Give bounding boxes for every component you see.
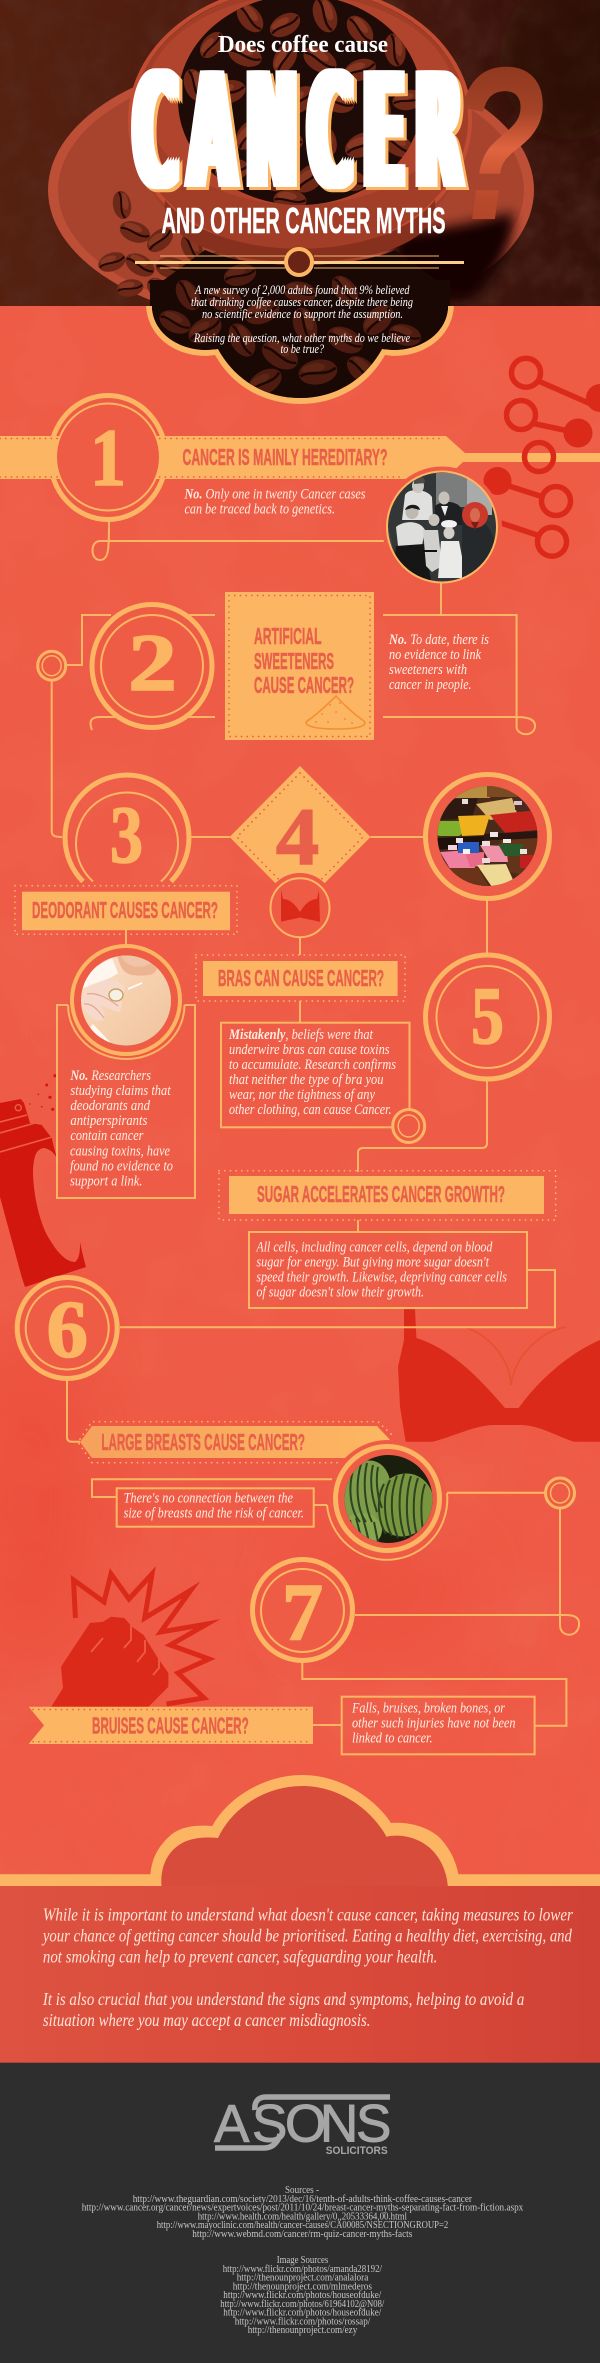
- myth 3 heading box: DEODORANT CAUSES CANCER?: [32, 897, 218, 923]
- photo: family: [384, 466, 502, 584]
- beans in cup: [180, 0, 425, 212]
- myth 5 heading box: [219, 1171, 556, 1220]
- myth 4 answer box: [221, 1023, 410, 1127]
- myth 3 answer: deodorants and: [70, 1098, 150, 1114]
- image sources: http://thenounproject.com/mlmederos: [233, 2281, 372, 2292]
- image sources: http://www.flickr.com/photos/houseofduke/: [223, 2308, 381, 2318]
- connector 5: [358, 901, 487, 1232]
- sources: http://www.mayoclinic.com/health/cancer-causes/CA00085/NSECTIONGROUP=2: [157, 2220, 448, 2231]
- myth 1 answer: [184, 487, 366, 518]
- myth 7 answer: other such injuries have not been: [352, 1716, 516, 1732]
- myth 3 heading box: [15, 886, 237, 934]
- circle 2: [92, 604, 212, 728]
- connector 4: [299, 938, 301, 1023]
- image sources: [220, 2255, 384, 2336]
- icon: burst: [74, 1574, 209, 1704]
- ornament divider: [135, 249, 464, 275]
- sources: http://www.webmd.com/cancer/rm-quiz-cancer-myths-facts: [192, 2229, 412, 2240]
- myth 4 answer: Mistakenly, beliefs were that: [228, 1027, 374, 1043]
- myth 4 heading box: [196, 955, 405, 1001]
- icon: small bra: [265, 873, 335, 943]
- myth 3 answer box: [57, 1005, 195, 1198]
- photo: deodorant: [72, 946, 180, 1054]
- myth 7 answer: [351, 1701, 516, 1747]
- myth 7 heading ribbon: BRUISES CAUSE CANCER?: [92, 1712, 249, 1738]
- watermelon outer arc: [327, 1493, 447, 1560]
- conclusion panel: [0, 1775, 600, 2063]
- myth 3 answer: support a link.: [70, 1174, 142, 1190]
- myth 6 answer box: [117, 1488, 314, 1527]
- myth 2 answer: No. To date, there is: [388, 632, 489, 648]
- myth 2 heading: ARTIFICIAL: [254, 623, 322, 649]
- myth 7 heading ribbon: [29, 1707, 313, 1744]
- icon: large bra: [398, 1309, 600, 1442]
- myth 2 answer: cancer in people.: [389, 677, 472, 693]
- small ring node myth 4: [393, 1110, 425, 1142]
- myth 3 answer: antiperspirants: [70, 1113, 148, 1129]
- myth 2 heading: CAUSE CANCER?: [254, 672, 354, 698]
- photo: watermelons: [332, 1440, 442, 1553]
- intro text: that drinking coffee causes cancer, despite there being: [191, 295, 413, 309]
- icon: fist: [50, 1617, 168, 1708]
- myth 1 answer: can be traced back to genetics.: [184, 502, 335, 518]
- myth 2 answer: no evidence to link: [389, 647, 481, 663]
- left bean pile: [98, 190, 238, 297]
- myth 4 answer: underwire bras can cause toxins: [229, 1042, 390, 1058]
- myth 3 answer: studying claims that: [70, 1083, 171, 1099]
- question mark: ?: [448, 23, 546, 266]
- myth 3 answer: contain cancer: [70, 1128, 144, 1144]
- myth 6 answer: There's no connection between the: [124, 1491, 293, 1507]
- image sources: http://www.flickr.com/photos/houseofduke/: [223, 2290, 381, 2301]
- myth 2 heading: SWEETENERS: [254, 648, 334, 674]
- image sources: Image Sources: [277, 2255, 328, 2266]
- number 6: 6: [46, 1284, 88, 1374]
- logo: ASONS: [214, 2095, 391, 2154]
- sources: Sources -: [285, 2185, 319, 2196]
- saucer shadow: [385, 212, 513, 300]
- logo: SOLICITORS: [326, 2145, 388, 2157]
- image sources: http://thenounproject.com/ezy: [248, 2325, 357, 2336]
- number 2: 2: [128, 617, 177, 708]
- myth 5 answer: All cells, including cancer cells, depend on blood: [256, 1240, 493, 1256]
- conclusion text: [41, 1905, 574, 2030]
- myth 6 connector lines: [92, 1479, 544, 1505]
- myth 1 heading: CANCER IS MAINLY HEREDITARY?: [182, 444, 388, 470]
- myth 4 answer: [228, 1027, 396, 1118]
- myth 2 answer: sweeteners with: [389, 662, 467, 678]
- myth 7 answer box: [342, 1697, 535, 1754]
- myth 2 heading: [254, 623, 354, 698]
- number 7: 7: [282, 1566, 323, 1657]
- myth 5 answer: sugar for energy. But giving more sugar doesn't: [256, 1255, 490, 1271]
- beans in lobe: [150, 280, 450, 405]
- circle 3: [65, 775, 189, 882]
- intro text: no scientific evidence to support the assumption.: [202, 307, 403, 321]
- header photo: coffee cup and beans: [0, 0, 600, 410]
- myth 1 answer: No. Only one in twenty Cancer cases: [184, 487, 366, 503]
- circle 6: [17, 1278, 117, 1378]
- myth 4 answer: wear, nor the tightness of any: [229, 1087, 375, 1103]
- myth 4 answer: that neither the type of bra you: [229, 1072, 384, 1088]
- number 3: 3: [110, 789, 143, 880]
- cup: [140, 0, 466, 234]
- number 4: 4: [276, 791, 319, 882]
- intro text: A new survey of 2,000 adults found that 9% believed: [194, 283, 410, 297]
- myth 2 answer: [388, 632, 489, 693]
- myth 6 answer: size of breasts and the risk of cancer.: [124, 1506, 304, 1522]
- sources: http://www.cancer.org/cancer/news/expertvoices/post/2011/10/24/breast-cancer-myths-separating-fact-from-fiction.aspx: [82, 2203, 523, 2214]
- myth 4 answer: other clothing, can cause Cancer.: [229, 1102, 392, 1118]
- myth 7 answer: linked to cancer.: [352, 1731, 432, 1747]
- myth 1 ribbon: [0, 396, 600, 520]
- connectors 3-4-5: [191, 836, 423, 838]
- number 5: 5: [471, 970, 504, 1061]
- small ring node and line to myth 3: [38, 651, 66, 837]
- myth 6 answer: [124, 1491, 304, 1522]
- myth 5 answer box: [249, 1232, 527, 1308]
- image sources: http://www.flickr.com/photos/61964102@N08/: [220, 2299, 384, 2310]
- circle 7: [252, 1560, 352, 1660]
- myth 2 panel: [225, 592, 374, 740]
- sources: [82, 2185, 523, 2240]
- myth 2 connectors: [67, 583, 535, 734]
- myth 4 diamond: [230, 766, 370, 908]
- image sources: http://www.flickr.com/photos/amanda28192/: [223, 2264, 382, 2275]
- image sources: http://www.flickr.com/photos/rossap/: [235, 2316, 370, 2327]
- header band and scallop border: [0, 300, 600, 404]
- myth 4 answer: to accumulate. Research confirms: [229, 1057, 396, 1073]
- icon: sugar pile: [306, 696, 365, 729]
- myth 6 heading: LARGE BREASTS CAUSE CANCER?: [101, 1429, 305, 1455]
- photo: sweets market: [426, 774, 550, 898]
- connector 1: [92, 522, 386, 560]
- myth 5 answer: [256, 1240, 507, 1301]
- footer: [0, 2063, 600, 2363]
- connector 7: [302, 1663, 566, 1726]
- myth 7 answer: Falls, bruises, broken bones, or: [351, 1701, 505, 1717]
- connector 6: [67, 1381, 80, 1442]
- intro text: [191, 283, 413, 356]
- myth 4 heading box: BRAS CAN CAUSE CANCER?: [218, 965, 384, 991]
- myth 3 answer: causing toxins, have: [70, 1144, 170, 1160]
- saucer: [48, 88, 534, 300]
- conclusion text: not smoking can help to prevent cancer, safeguarding your health.: [43, 1947, 437, 1967]
- circle 5: [426, 955, 550, 1079]
- deodorant lower arc: [68, 1005, 184, 1059]
- conclusion text: situation where you may accept a cancer misdiagnosis.: [43, 2010, 371, 2030]
- myth 5 answer: speed their growth. Likewise, depriving cancer cells: [256, 1270, 507, 1286]
- myth 3 answer: [70, 1068, 173, 1190]
- intro text: to be true?: [280, 342, 325, 356]
- myth 3 answer: No. Researchers: [70, 1068, 151, 1084]
- sources: http://www.theguardian.com/society/2013/dec/16/tenth-of-adults-think-coffee-causes-cancer: [133, 2194, 473, 2205]
- myth 6 heading: [78, 1422, 392, 1463]
- myth 3 answer: found no evidence to: [70, 1159, 173, 1175]
- myth 5 answer: of sugar doesn't slow their growth.: [256, 1285, 424, 1301]
- intro text: Raising the question, what other myths do we believe: [193, 331, 410, 345]
- connector 5 to 6: [120, 1270, 555, 1327]
- small ring node myth 6: [355, 1478, 579, 1635]
- sources: http://www.health.com/health/gallery/0,,20533364,00.html: [198, 2212, 407, 2222]
- number 1: 1: [90, 412, 126, 503]
- connector 3: [125, 930, 127, 947]
- header subtitle: Does coffee cause: [218, 32, 388, 58]
- title: CANCER: CANCER: [128, 38, 467, 225]
- spray can: [0, 1074, 86, 1287]
- image sources: http://thenounproject.com/analalora: [237, 2273, 369, 2284]
- molecules behind photo: [484, 358, 600, 556]
